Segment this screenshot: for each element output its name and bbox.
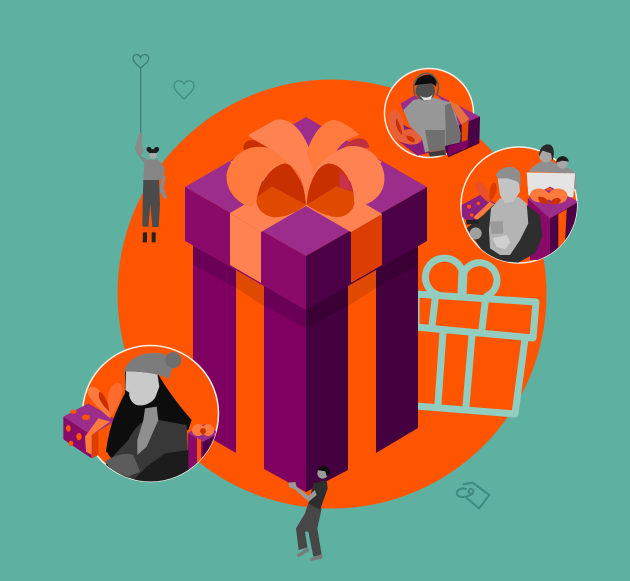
gift right and left [462,182,578,260]
people behind laptop [527,144,577,197]
circle: woman with phone [461,144,578,263]
woman [466,167,542,263]
small gift left [63,383,122,458]
figure [135,132,167,242]
icon: price tag [457,483,489,508]
bow [227,119,384,217]
big orange circle [118,80,546,508]
gift behind [389,93,480,157]
circle: man with laptop [384,68,480,158]
bow [530,189,568,203]
balloon [133,55,149,133]
man [403,73,461,157]
lid ribbon [230,213,261,283]
person lifting box [288,466,330,561]
woman [105,352,192,483]
giant gift box [185,117,427,492]
small gift right [188,424,216,470]
shadows under lid [193,238,418,328]
lid [185,117,427,310]
circle: woman with gifts [63,346,219,483]
icon: outline gift [416,258,536,414]
icon: heart outline [174,81,194,99]
person with heart balloon [133,55,167,242]
body ribbons [193,240,418,492]
